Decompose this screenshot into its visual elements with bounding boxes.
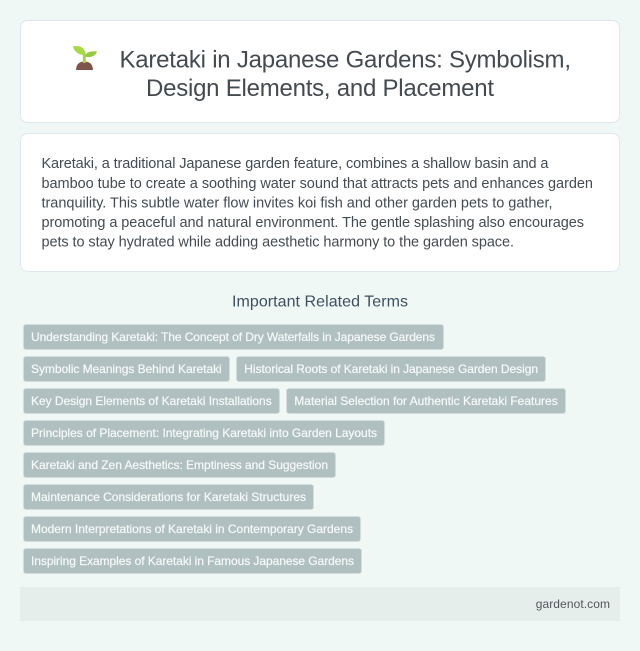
heading: title xyxy=(120,46,571,102)
text block: description: bamboo tube to create a soothing water sound that attracts pets and enhances garden xyxy=(42,176,593,192)
chip: understanding karetaki xyxy=(24,324,444,350)
footer xyxy=(20,587,620,621)
chip: material selection xyxy=(286,388,566,414)
text block: description: tranquility. This subtle water flow invites koi fish and other garden pets to gather, xyxy=(42,195,552,211)
text block: description xyxy=(42,156,593,251)
chip: symbolic meanings xyxy=(24,356,230,382)
chip: zen aesthetics: Karetaki and Zen Aesthetics: Emptiness and Suggestion xyxy=(31,458,328,472)
text block: description: promoting a peaceful and natural environment. The gentle splashing also encourages xyxy=(42,215,584,231)
chip: historical roots: Historical Roots of Karetaki in Japanese Garden Design xyxy=(244,362,538,376)
panel: title card xyxy=(20,20,620,122)
chip: principles of placement: Principles of Placement: Integrating Karetaki into Garden Layouts xyxy=(31,426,377,440)
footer: gardenot.com xyxy=(536,597,610,611)
heading: title: Design Elements, and Placement xyxy=(146,75,494,102)
panel: description xyxy=(20,134,620,272)
icon: sprout xyxy=(73,46,97,70)
chip: inspiring examples xyxy=(24,548,362,574)
chip: zen aesthetics xyxy=(24,452,336,478)
chip: modern interpretations: Modern Interpretations of Karetaki in Contemporary Gardens xyxy=(31,522,353,536)
heading: title: Karetaki in Japanese Gardens: Symbolism, xyxy=(120,46,571,74)
heading: related terms: Important Related Terms xyxy=(232,294,408,311)
chip: key design elements xyxy=(24,388,280,414)
chip: inspiring examples: Inspiring Examples of Karetaki in Famous Japanese Gardens xyxy=(31,554,354,568)
chip: material selection: Material Selection for Authentic Karetaki Features xyxy=(294,394,558,408)
text block: description: Karetaki, a traditional Japanese garden feature, combines a shallow basin and a xyxy=(42,156,549,172)
text block: description: pets to stay hydrated while adding aesthetic harmony to the garden space. xyxy=(42,235,514,251)
chip: maintenance: Maintenance Considerations for Karetaki Structures xyxy=(31,490,306,504)
chip: key design elements: Key Design Elements of Karetaki Installations xyxy=(31,394,272,408)
chip: historical roots xyxy=(236,356,546,382)
chip: principles of placement xyxy=(24,420,384,446)
chip: symbolic meanings: Symbolic Meanings Behind Karetaki xyxy=(31,362,222,376)
chip: maintenance xyxy=(24,484,314,510)
chip: modern interpretations xyxy=(24,516,360,542)
chip: understanding karetaki: Understanding Karetaki: The Concept of Dry Waterfalls in Japanese Gardens xyxy=(31,330,435,344)
